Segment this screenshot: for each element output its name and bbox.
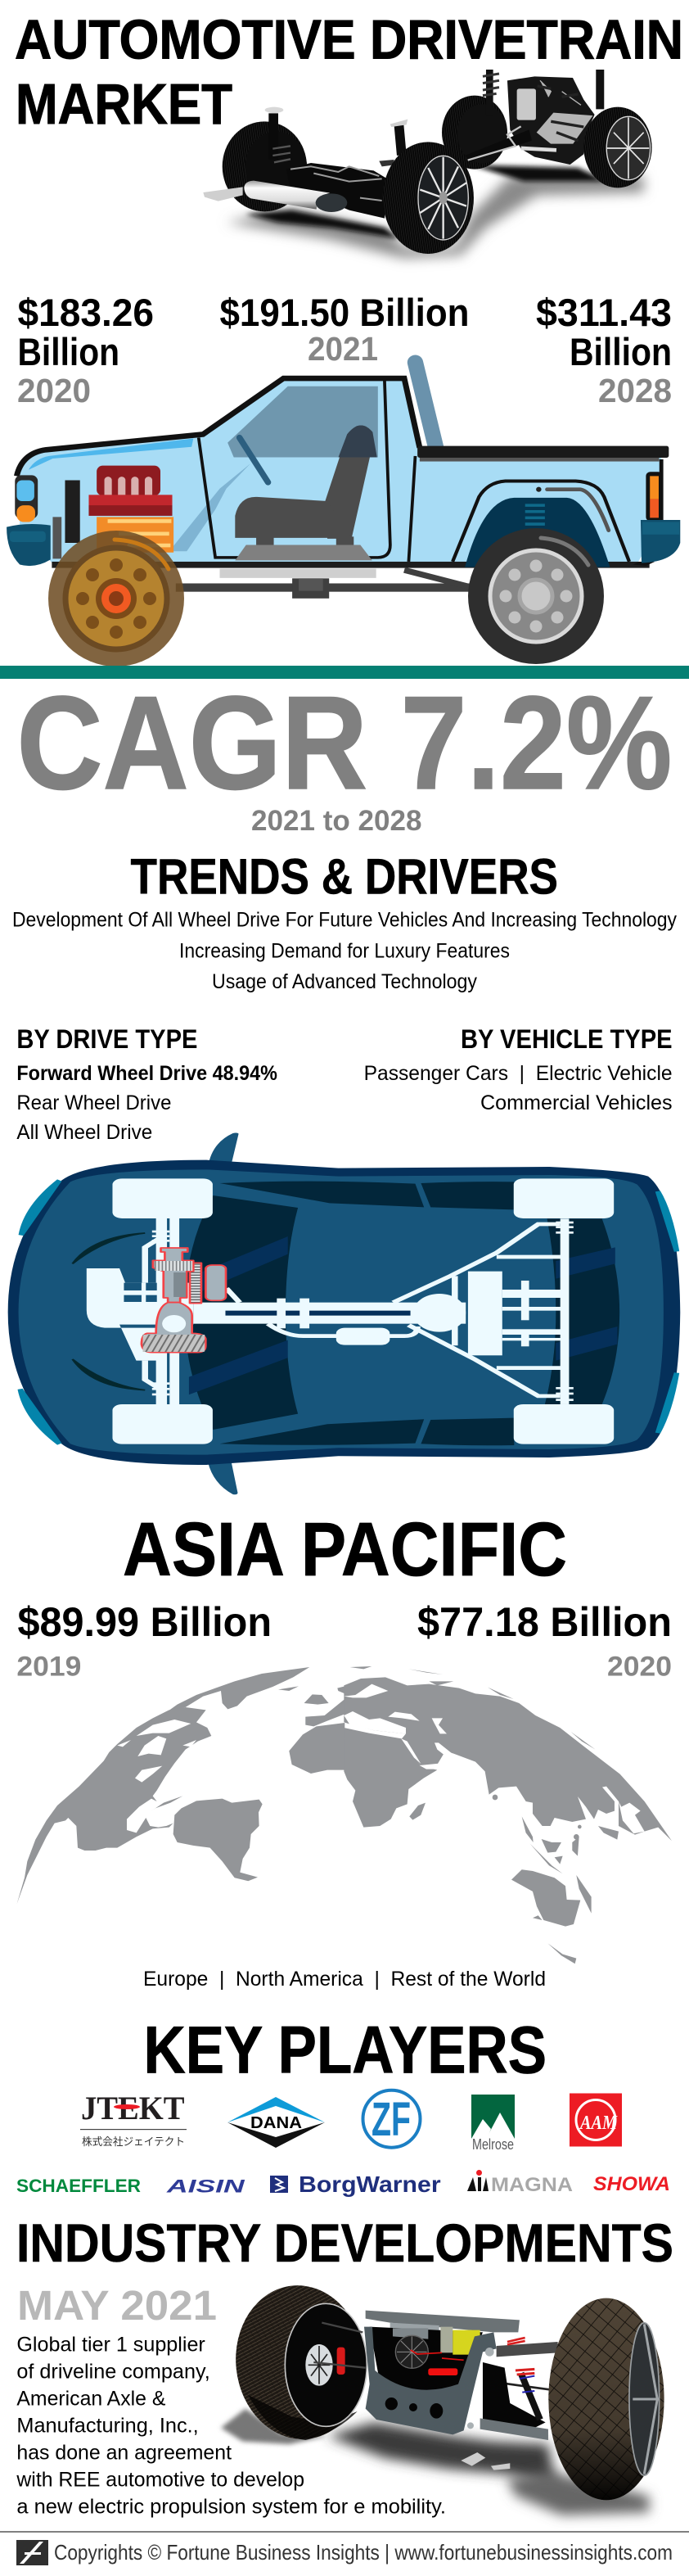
- CAGR figure: 2021 to 2028: [251, 805, 422, 837]
- segment: by vehicle type: BY VEHICLE TYPE: [461, 1024, 673, 1054]
- logo: ZF: ZF: [372, 2093, 411, 2146]
- segment: by drive type: Forward Wheel Drive 48.94%: [16, 1062, 277, 1085]
- market value 2028: [536, 291, 672, 409]
- paragraph: development description: has done an agreement: [16, 2442, 232, 2465]
- logo: JTEKT: JTEKT: [81, 2090, 185, 2126]
- logo: JTEKT: [80, 2090, 187, 2149]
- segment: by drive type: [16, 1024, 277, 1144]
- list: trends and drivers: Increasing Demand for Luxury Features: [179, 939, 510, 962]
- logo: Dana: DANA: [250, 2114, 302, 2132]
- market value 2021: [219, 291, 470, 368]
- regions list: Europe | North America | Rest of the World: [143, 1968, 546, 1991]
- image: chassis with drivetrain: [203, 70, 652, 258]
- divider band: [0, 666, 689, 679]
- logo: AAM: [570, 2093, 622, 2147]
- icon: highlighted gearbox and differential: [142, 1248, 226, 1353]
- icon: rear wheel: [468, 528, 604, 664]
- paragraph: development description: of driveline company,: [16, 2361, 210, 2384]
- paragraph: development description: American Axle &: [16, 2388, 166, 2411]
- segment: by vehicle type: [364, 1024, 673, 1114]
- map: world globe: [17, 1666, 672, 1964]
- title: [15, 8, 683, 136]
- logo: ZF: [363, 2090, 421, 2148]
- image: electric axle assembly: [221, 2279, 664, 2515]
- logo: Magna: MAGNA: [491, 2174, 573, 2196]
- illustration: pickup truck cutaway: [7, 363, 680, 667]
- logo: Magna: [467, 2170, 573, 2196]
- segment: by vehicle type: Commercial Vehicles: [480, 1091, 673, 1114]
- logo: Showa: SHOWA: [593, 2173, 670, 2195]
- title: MARKET: [16, 72, 232, 136]
- regional value 2020: [417, 1599, 672, 1682]
- heading: key players: KEY PLAYERS: [144, 2013, 547, 2088]
- market value 2020: [17, 291, 154, 409]
- icon: Fortune Business Insights logo: [16, 2540, 48, 2565]
- regional value 2019: $89.99 Billion: [18, 1599, 272, 1645]
- market value 2020: $183.26: [18, 291, 154, 334]
- market value 2021: $191.50 Billion: [219, 291, 470, 334]
- market value 2028: $311.43: [536, 291, 672, 334]
- month heading: MAY 2021: [17, 2282, 217, 2329]
- segment: by vehicle type: Passenger Cars | Electric Vehicle: [364, 1062, 673, 1085]
- logo: AAM: AAM: [579, 2113, 618, 2134]
- list: trends and drivers: Usage of Advanced Technology: [212, 970, 477, 993]
- paragraph: development description: with REE automotive to develop: [16, 2469, 304, 2492]
- paragraph: development description: Manufacturing, Inc.,: [16, 2415, 199, 2438]
- logo: BorgWarner: BorgWarner: [299, 2172, 441, 2197]
- logo: Schaeffler: SCHAEFFLER: [16, 2176, 141, 2196]
- segment: by drive type: All Wheel Drive: [16, 1121, 152, 1144]
- heading: Asia Pacific: ASIA PACIFIC: [123, 1507, 567, 1592]
- market value 2028: Billion: [570, 330, 672, 373]
- market value 2020: Billion: [18, 330, 119, 373]
- market value 2021: 2021: [308, 330, 378, 368]
- market value 2020: 2020: [17, 372, 91, 409]
- list: trends and drivers: [12, 908, 677, 993]
- regional value 2019: 2019: [16, 1651, 81, 1682]
- segment: by drive type: Rear Wheel Drive: [16, 1091, 171, 1114]
- logo: JTEKT: 株式会社ジェイテクト: [82, 2133, 185, 2149]
- regional value 2020: 2020: [607, 1651, 672, 1682]
- logo: Aisin: AISIN: [165, 2176, 245, 2197]
- illustration: car underbody with drivetrain: [8, 1132, 680, 1494]
- logo: Dana: [227, 2097, 325, 2148]
- regional value 2019: [16, 1599, 272, 1682]
- icon: front wheel: [48, 531, 184, 667]
- market value 2028: 2028: [598, 372, 672, 409]
- segment: by drive type: BY DRIVE TYPE: [16, 1024, 197, 1054]
- heading: trends and drivers: TRENDS & DRIVERS: [131, 848, 558, 904]
- paragraph: development description: a new electric propulsion system for e mobility.: [16, 2496, 446, 2519]
- paragraph: development description: Global tier 1 supplier: [16, 2334, 205, 2357]
- logo: Melrose: Melrose: [472, 2136, 514, 2153]
- footer rule: [0, 2531, 689, 2533]
- paragraph: development description: [16, 2334, 446, 2519]
- regional value 2020: $77.18 Billion: [417, 1599, 672, 1645]
- logo: Melrose: [471, 2095, 515, 2153]
